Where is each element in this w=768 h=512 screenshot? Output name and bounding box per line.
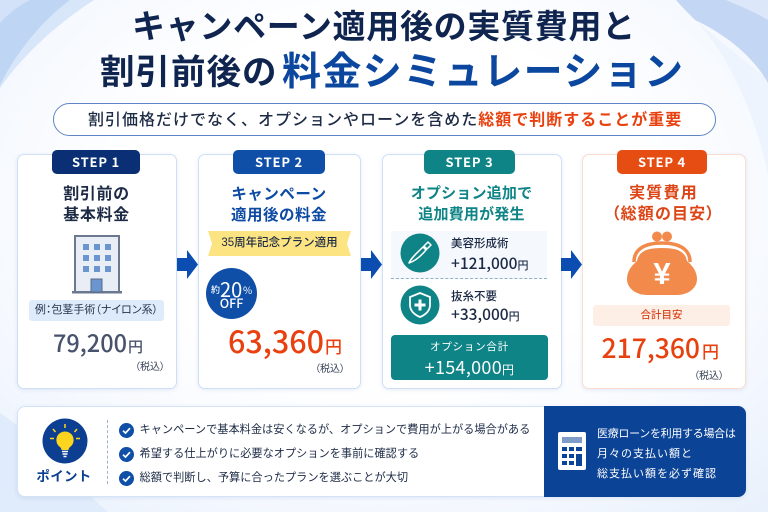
step 1 heading: 基本料金 [63,207,130,224]
panel: medical loan note [544,406,746,497]
icon: scalpel [400,234,440,272]
step 4 badge: STEP 4 [638,152,686,171]
panel: step 2 [198,154,361,389]
icon: building [72,235,122,294]
step 3 heading: 追加費用が発生 [418,206,525,223]
option total: +154,000円 [425,354,514,380]
icon: light bulb [42,418,88,464]
panel: points [17,406,746,497]
step 2 badge [233,150,325,174]
total label [593,305,730,326]
step 2 heading: 適用後の料金 [231,207,327,224]
discount badge: OFF [220,292,243,312]
step 1 badge: STEP 1 [72,152,120,171]
option total [391,335,548,380]
loan text: 総支払い額を必ず確認 [597,468,717,480]
discount badge [206,268,257,318]
loan text: 医療ローンを利用する場合は [597,428,736,440]
loan text: 月々の支払い額と [597,448,693,460]
point 2: 希望する仕上がりに必要なオプションを事前に確認する [140,448,419,460]
step 3 heading [411,185,532,223]
step 1 heading [63,185,130,224]
plan ribbon [208,231,351,256]
title: 料金シミュレーション [282,51,684,94]
discount badge: % [243,282,252,296]
panel: step 1 [17,154,177,389]
step badges [52,150,707,174]
total label: 合計目安 [640,309,682,321]
tax note: （税込） [315,364,345,375]
option row: no removal: +33,000円 [451,303,520,325]
price: 217,360円 [602,327,719,366]
step 3 heading: オプション追加で [411,185,532,202]
price: 63,360円 [228,318,342,362]
panel: step 2: 35周年記念プラン適用 [221,236,338,248]
step 3 badge [424,150,515,174]
example label: 例：包茎手術（ナイロン系） [35,304,158,316]
panel: step 4 [582,154,746,389]
title: キャンペーン適用後の実質費用と [132,8,636,45]
option total: オプション合計 [430,341,509,353]
arrow 1 [177,250,198,279]
icon: calculator [558,432,586,470]
option row: no removal [400,286,520,325]
step 2 heading [231,186,327,224]
point 3: 総額で判断し、予算に合ったプランを選ぶことが大切 [140,472,408,484]
discount badge: 20 [220,274,242,302]
step 1 heading: 割引前の [63,186,130,203]
option row: no removal: 抜糸不要 [451,291,497,303]
icon: purse: ¥ [653,256,671,290]
loan text [597,428,736,480]
subtitle pill: 割引価格だけでなく、オプションやローンを含めた総額で判断することが重要 [88,112,682,129]
step 4 heading [611,184,716,223]
example label [29,300,164,320]
point 1: キャンペーンで基本料金は安くなるが、オプションで費用が上がる場合がある [140,424,530,436]
step 4 heading: 実質費用 [629,185,698,202]
option row: cosmetic: 美容形成術 [451,238,508,250]
title: 割引前後の [100,54,278,92]
tax note: （税込） [135,362,165,373]
step 1 badge [52,150,140,174]
point list [106,420,538,484]
step 4 heading: （総額の目安） [611,206,716,223]
step 2 heading: キャンペーン [231,186,327,203]
option row: cosmetic: +121,000円 [451,252,528,274]
subtitle pill [53,103,716,136]
step 4 badge [617,150,707,174]
title [100,8,684,94]
step 2 badge: STEP 2 [255,152,303,171]
option row: cosmetic [391,231,547,279]
point label: ポイント [36,469,92,484]
price: 79,200円 [53,325,143,359]
arrow 2 [361,250,382,279]
tax note: （税込） [694,371,724,382]
icon: purse [627,232,697,295]
step 3 badge: STEP 3 [445,152,494,171]
arrow 3 [561,250,582,279]
icon: shield [400,286,440,324]
panel: step 3 [382,154,562,389]
discount badge: 約 [211,282,220,296]
